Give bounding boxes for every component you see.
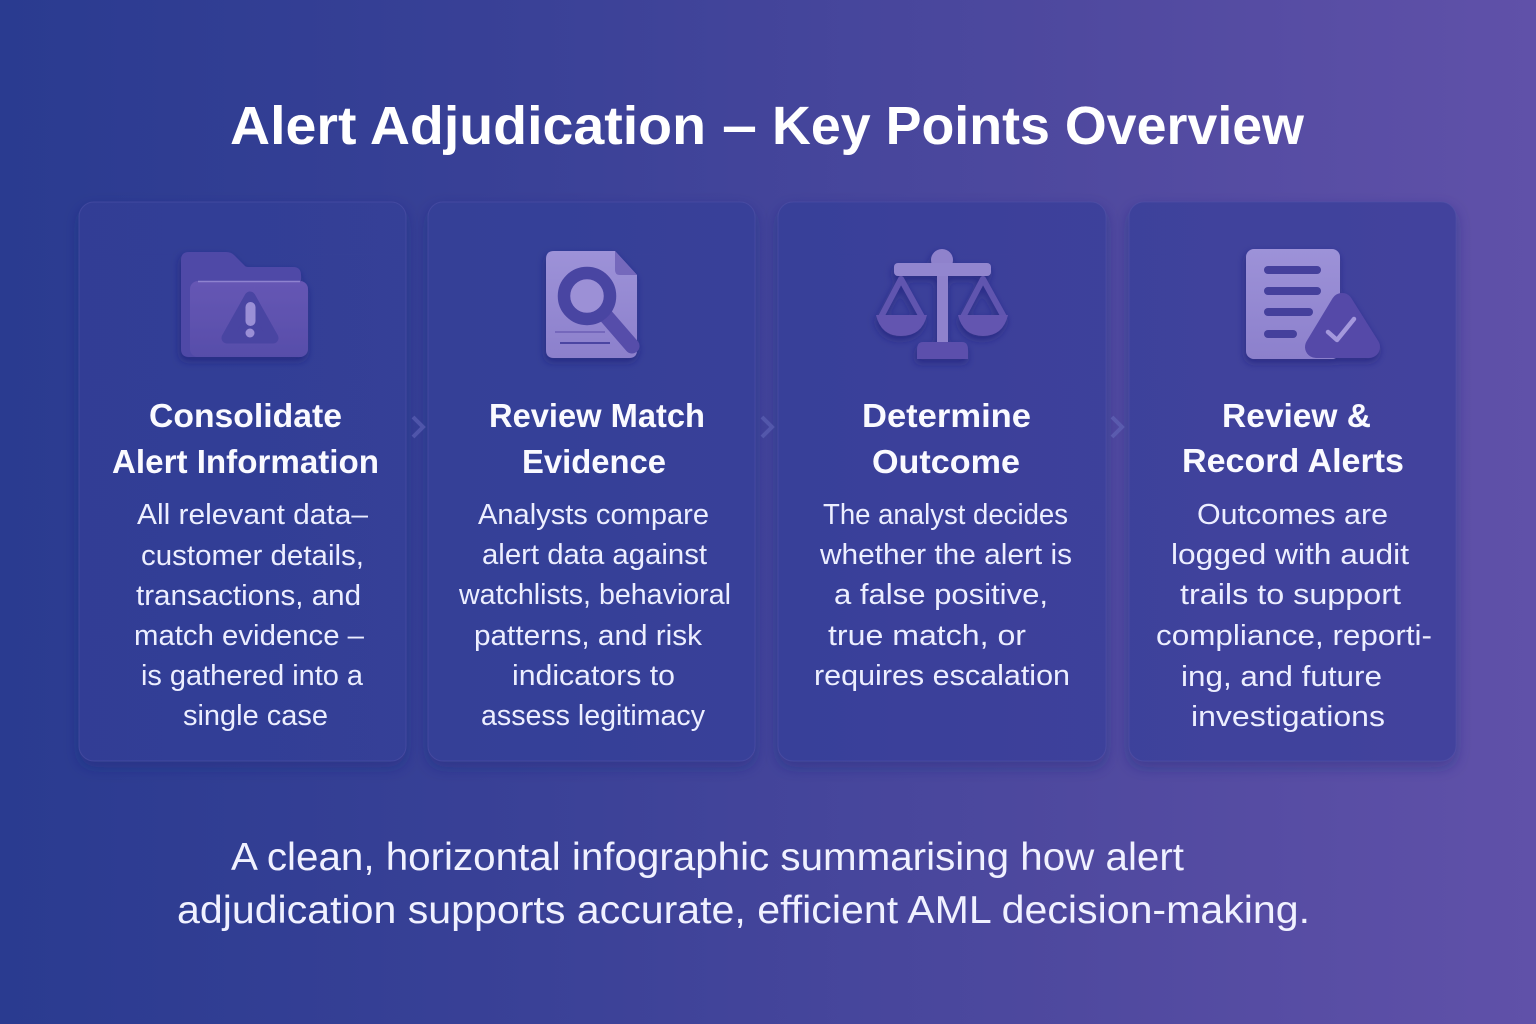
text block: transactions, and (136, 580, 361, 612)
text block (134, 499, 369, 732)
text block: customer details, (141, 540, 364, 572)
text block: alert data against (482, 539, 707, 571)
title: – (722, 96, 757, 156)
heading (112, 397, 379, 480)
text block: whether the alert is (819, 539, 1072, 571)
panel: consolidate alert information (79, 202, 406, 761)
text block: assess legitimacy (481, 700, 705, 732)
text block: match evidence – (134, 620, 365, 652)
heading (489, 397, 705, 480)
heading: Outcome (872, 443, 1020, 480)
heading (1182, 397, 1404, 479)
title (230, 96, 1305, 156)
text block (1156, 499, 1432, 733)
text block: true match, or (828, 620, 1026, 652)
heading (862, 397, 1031, 480)
icon: checklist document with check badge (1246, 249, 1369, 359)
text block: a false positive, (834, 579, 1048, 611)
heading: Evidence (522, 443, 666, 480)
text block: The analyst decides (823, 499, 1068, 531)
text block (814, 499, 1072, 692)
panel: determine outcome (778, 202, 1106, 761)
heading: Alert Information (112, 443, 379, 480)
text block: Analysts compare (478, 499, 709, 531)
heading: Review Match (489, 397, 705, 434)
icon: balance scales (876, 249, 1008, 359)
icon: document with magnifying glass (546, 251, 637, 358)
arrow: step 3 to 4 (1112, 417, 1122, 437)
text block: trails to support (1180, 579, 1401, 611)
arrow: step 2 to 3 (762, 417, 772, 437)
text block (458, 499, 731, 732)
panel: review and record alerts (1129, 202, 1456, 761)
title: Alert Adjudication (230, 96, 706, 156)
text block: compliance, reporti- (1156, 620, 1432, 652)
panel: review match evidence (428, 202, 755, 761)
text block: All relevant data– (137, 499, 369, 531)
heading: Determine (862, 397, 1031, 434)
text block: Outcomes are (1197, 499, 1388, 531)
text block: is gathered into a (141, 660, 364, 692)
heading: Consolidate (149, 397, 342, 434)
heading: Review & (1222, 397, 1371, 434)
text block: single case (183, 700, 328, 732)
text block: requires escalation (814, 660, 1070, 692)
footer caption (177, 836, 1310, 932)
heading: Record Alerts (1182, 442, 1404, 479)
text block: logged with audit (1171, 539, 1409, 571)
text block: patterns, and risk (474, 620, 703, 652)
footer caption: adjudication supports accurate, efficient AML decision-making. (177, 889, 1310, 932)
title: Key Points Overview (772, 96, 1305, 156)
text block: indicators to (512, 660, 675, 692)
text block: ing, and future (1181, 661, 1382, 693)
icon: folder with warning triangle (181, 252, 308, 357)
text block: watchlists, behavioral (458, 579, 731, 611)
footer caption: A clean, horizontal infographic summarising how alert (231, 836, 1184, 879)
text block: investigations (1191, 701, 1385, 733)
arrow: step 1 to 2 (413, 417, 423, 437)
